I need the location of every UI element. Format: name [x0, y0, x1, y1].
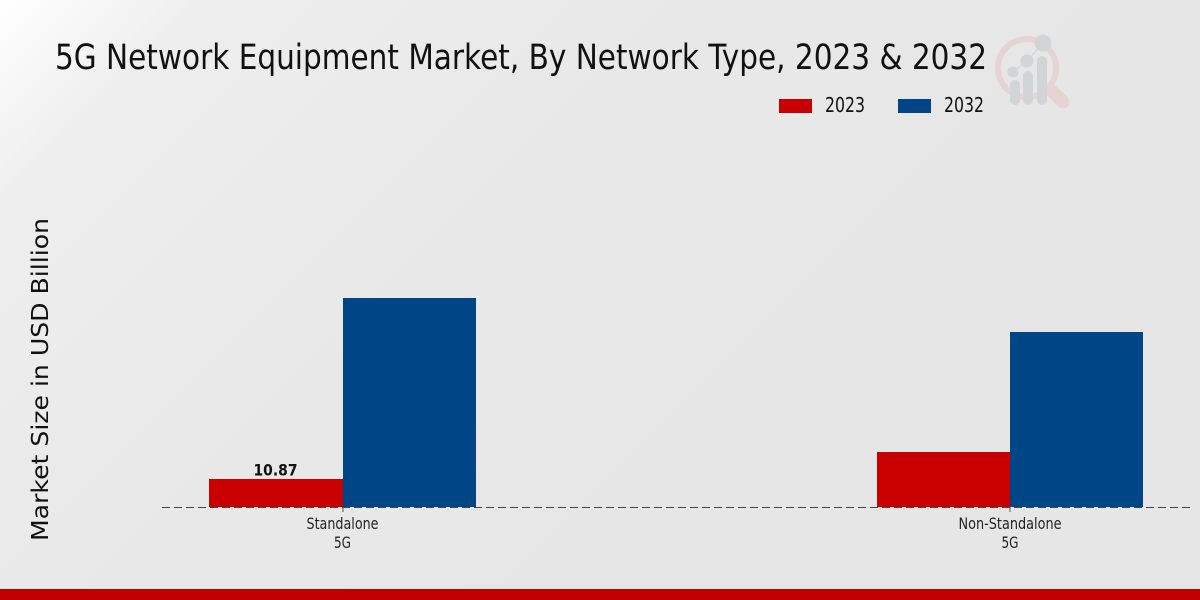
legend item: 2023	[779, 93, 865, 117]
bar: Non-Standalone 5G 2032	[1010, 332, 1143, 507]
footer bar	[0, 589, 1200, 600]
category label: Non-Standalone 5G: 5G	[1002, 533, 1018, 552]
value label: 10.87	[254, 460, 298, 480]
title: 5G Network Equipment Market, By Network Type, 2023 & 2032	[55, 38, 987, 78]
legend item: 2032: 2032	[944, 93, 984, 117]
bar: Non-Standalone 5G 2023	[877, 452, 1010, 507]
bar: Standalone 5G 2032	[343, 298, 476, 507]
bar chart	[162, 298, 1190, 552]
legend	[779, 93, 984, 117]
category label: Non-Standalone 5G	[958, 514, 1062, 552]
category label: Standalone 5G: 5G	[334, 533, 351, 552]
y-axis title: Market Size in USD Billion	[28, 218, 54, 541]
bar: Standalone 5G 2023	[209, 479, 343, 507]
legend item: 2023: 2023	[825, 93, 865, 117]
legend item: 2032	[898, 93, 984, 117]
baseline	[162, 506, 1190, 508]
category label: Standalone 5G: Standalone	[306, 514, 378, 533]
logo: magnifier with bars	[998, 34, 1063, 105]
category label: Standalone 5G	[306, 514, 378, 552]
category label: Non-Standalone 5G: Non-Standalone	[958, 514, 1062, 533]
